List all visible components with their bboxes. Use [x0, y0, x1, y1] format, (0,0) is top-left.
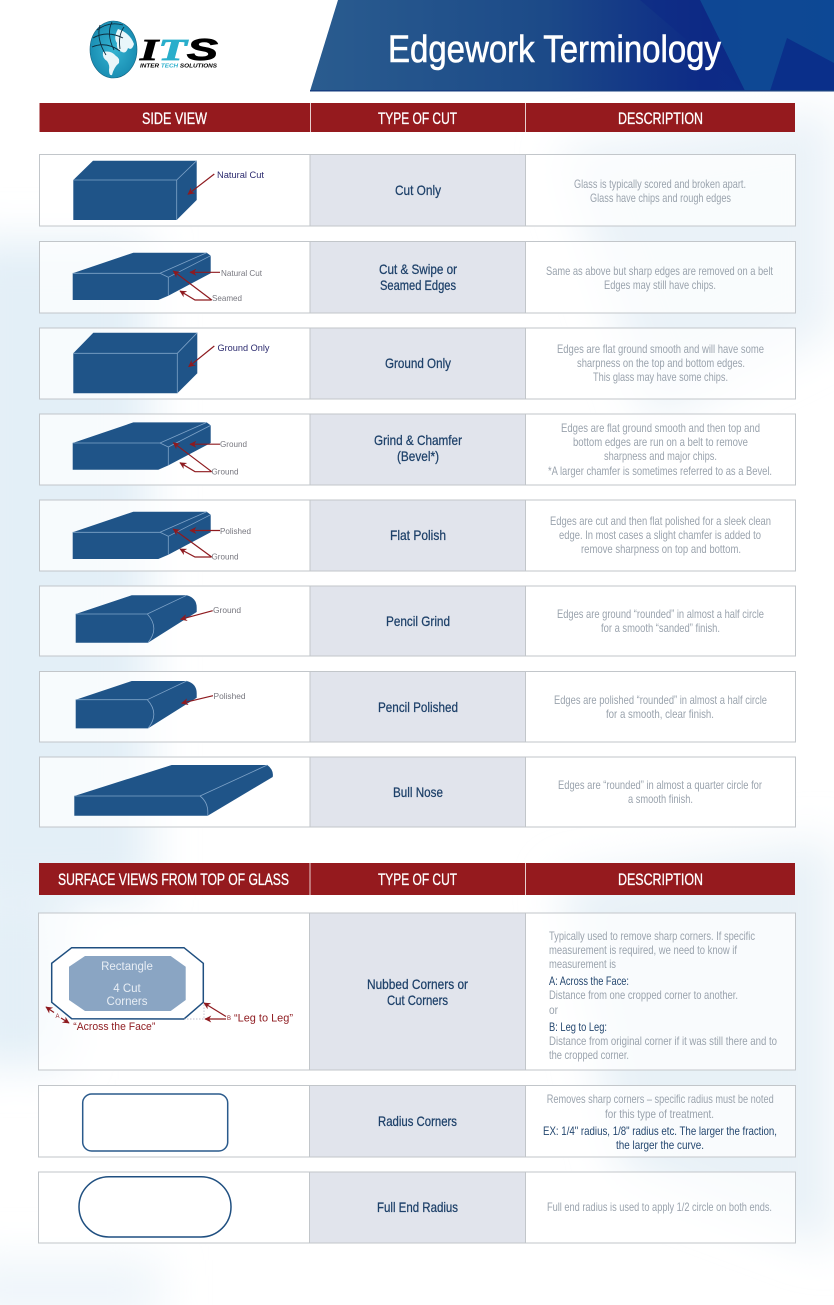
row: Cut & Swipe: Seamed Edges: [380, 277, 456, 293]
row: Nubbed Corners: Typically used to remove sharp corners. If specific: [549, 929, 755, 943]
row: Grind & Chamfer: bottom edges are run on a belt to remove: [573, 435, 748, 449]
tagline: INTER TECH SOLUTIONS: [140, 64, 217, 70]
diagram: pencil polished block: [76, 681, 246, 728]
row: Pencil Grind: Edges are ground “rounded” in almost a half circle: [557, 607, 764, 621]
row: Cut Only: Glass have chips and rough edges: [590, 191, 731, 205]
row: Pencil Grind: [40, 586, 796, 656]
title: Edgework Terminology: [388, 29, 721, 71]
row: Nubbed Corners: measurement is: [549, 957, 616, 971]
diagram: ground block: [73, 333, 270, 393]
row: Nubbed Corners: B: Leg to Leg:: [549, 1020, 607, 1034]
row: Flat Polish: remove sharpness on top and bottom.: [581, 542, 741, 556]
diagram: polished block: Polished: [220, 526, 251, 536]
diagram: full end radius shape: [79, 1177, 231, 1237]
row: Nubbed Corners: [38, 913, 796, 1070]
row: Flat Polish: Flat Polish: [390, 527, 446, 543]
row: Grind & Chamfer: Edges are flat ground smooth and then top and: [561, 421, 760, 435]
row: Nubbed Corners: Cut Corners: [387, 992, 448, 1008]
diagram: chamfer block: Ground: [220, 439, 247, 449]
table header: surface views: [39, 863, 795, 895]
row: Pencil Polished: Pencil Polished: [378, 699, 458, 715]
table header: side view: SIDE VIEW: [142, 109, 207, 128]
row: Grind & Chamfer: Grind & Chamfer: [374, 432, 462, 448]
diagram: cut corners rectangle: “Across the Face”: [73, 1021, 156, 1033]
diagram: natural cut block: Natural Cut: [217, 170, 265, 180]
diagram: pencil ground block: Ground: [213, 605, 241, 615]
row: Nubbed Corners: the cropped corner.: [549, 1048, 629, 1062]
diagram: chamfer block: [73, 422, 247, 477]
row: Full End Radius: Full End Radius: [377, 1199, 458, 1215]
row: Bull Nose: a smooth finish.: [628, 792, 693, 806]
row: Radius Corners: for this type of treatment.: [605, 1107, 714, 1121]
row: Cut & Swipe: Edges may still have chips.: [604, 278, 716, 292]
row: Cut Only: [40, 154, 796, 226]
row: Radius Corners: the larger the curve.: [616, 1138, 704, 1152]
row: Ground Only: sharpness on the top and bottom edges.: [577, 356, 745, 370]
table header: surface views: SURFACE VIEWS FROM TOP OF GLASS: [58, 870, 289, 889]
row: Grind & Chamfer: sharpness and major chips.: [604, 449, 717, 463]
row: Cut & Swipe: [40, 242, 796, 313]
row: Cut Only: Glass is typically scored and broken apart.: [574, 177, 746, 191]
diagram: seamed block: Seamed: [212, 293, 242, 303]
row: Full End Radius: [38, 1172, 796, 1243]
row: Radius Corners: [38, 1086, 796, 1157]
row: Grind & Chamfer: *A larger chamfer is sometimes referred to as a Bevel.: [548, 464, 772, 478]
row: Bull Nose: Edges are “rounded” in almost a quarter circle for: [558, 778, 762, 792]
diagram: cut corners rectangle: B: [227, 1016, 231, 1022]
diagram: cut corners rectangle: A: [55, 1014, 60, 1020]
table header: side view: [40, 103, 795, 132]
row: Radius Corners: Removes sharp corners – specific radius must be noted: [547, 1092, 774, 1106]
row: Cut & Swipe: Same as above but sharp edges are removed on a belt: [546, 264, 774, 278]
row: Pencil Polished: for a smooth, clear finish.: [606, 707, 714, 721]
row: Nubbed Corners: A: Across the Face:: [549, 974, 629, 988]
diagram: natural cut block: [73, 161, 265, 220]
row: Cut & Swipe: Cut & Swipe or: [379, 261, 457, 277]
row: Nubbed Corners: Distance from original corner if it was still there and to: [549, 1034, 777, 1048]
icon: globe: [90, 21, 137, 78]
table header: surface views: DESCRIPTION: [618, 870, 703, 889]
diagram: pencil ground block: [76, 595, 241, 643]
row: Nubbed Corners: Distance from one cropped corner to another.: [549, 988, 738, 1002]
table header: side view: TYPE OF CUT: [378, 109, 457, 128]
diagram: bull nose block: [74, 765, 273, 816]
diagram: polished block: [73, 512, 251, 562]
diagram: seamed block: Natural Cut: [221, 268, 263, 278]
arrow: leg to leg: [204, 1003, 226, 1016]
row: Full End Radius: Full end radius is used to apply 1/2 circle on both ends.: [547, 1200, 772, 1214]
row: Nubbed Corners: Nubbed Corners or: [367, 976, 468, 992]
table header: surface views: TYPE OF CUT: [378, 870, 457, 889]
logo: ITS Inter Tech Solutions: [90, 21, 218, 78]
diagram: seamed block: [73, 253, 263, 303]
row: Nubbed Corners: measurement is required, we need to know if: [549, 943, 738, 957]
row: Pencil Polished: [40, 672, 796, 742]
table header: side view: DESCRIPTION: [618, 109, 703, 128]
row: Grind & Chamfer: (Bevel*): [397, 448, 439, 464]
row: Pencil Grind: for a smooth “sanded” finish.: [601, 621, 720, 635]
header banner: [310, 0, 834, 92]
row: Nubbed Corners: or: [549, 1003, 558, 1017]
row: Ground Only: This glass may have some chips.: [593, 370, 728, 384]
row: Pencil Polished: Edges are polished “rounded” in almost a half circle: [554, 693, 767, 707]
row: Bull Nose: Bull Nose: [393, 784, 443, 800]
row: Cut Only: Cut Only: [395, 182, 441, 198]
row: Ground Only: Edges are flat ground smooth and will have some: [557, 342, 764, 356]
row: Pencil Grind: Pencil Grind: [386, 613, 450, 629]
row: Ground Only: Ground Only: [385, 355, 451, 371]
wordmark: IT S: [138, 32, 218, 67]
diagram: polished block: Ground: [212, 552, 239, 562]
row: Radius Corners: EX: 1/4" radius, 1/8" radius etc. The larger the fraction,: [543, 1124, 777, 1138]
row: Bull Nose: [40, 757, 796, 827]
diagram: cut corners rectangle: [46, 948, 293, 1033]
row: Radius Corners: Radius Corners: [378, 1113, 457, 1129]
row: Grind & Chamfer: [40, 414, 796, 485]
diagram: pencil polished block: Polished: [214, 691, 246, 701]
row: Flat Polish: [40, 500, 796, 571]
diagram: cut corners rectangle: Rectangle: [101, 961, 153, 973]
arrow: across the face: [46, 1007, 54, 1012]
diagram: cut corners rectangle: Corners: [107, 996, 148, 1008]
diagram: cut corners rectangle: 4 Cut: [113, 983, 142, 995]
diagram: ground block: Ground Only: [218, 343, 270, 353]
diagram: radius corners rectangle: [83, 1094, 228, 1151]
row: Flat Polish: edge. In most cases a slight chamfer is added to: [559, 528, 761, 542]
row: Flat Polish: Edges are cut and then flat polished for a sleek clean: [550, 514, 771, 528]
row: Ground Only: [40, 328, 796, 399]
diagram: cut corners rectangle: “Leg to Leg”: [234, 1013, 293, 1025]
diagram: chamfer block: Ground: [212, 467, 239, 477]
